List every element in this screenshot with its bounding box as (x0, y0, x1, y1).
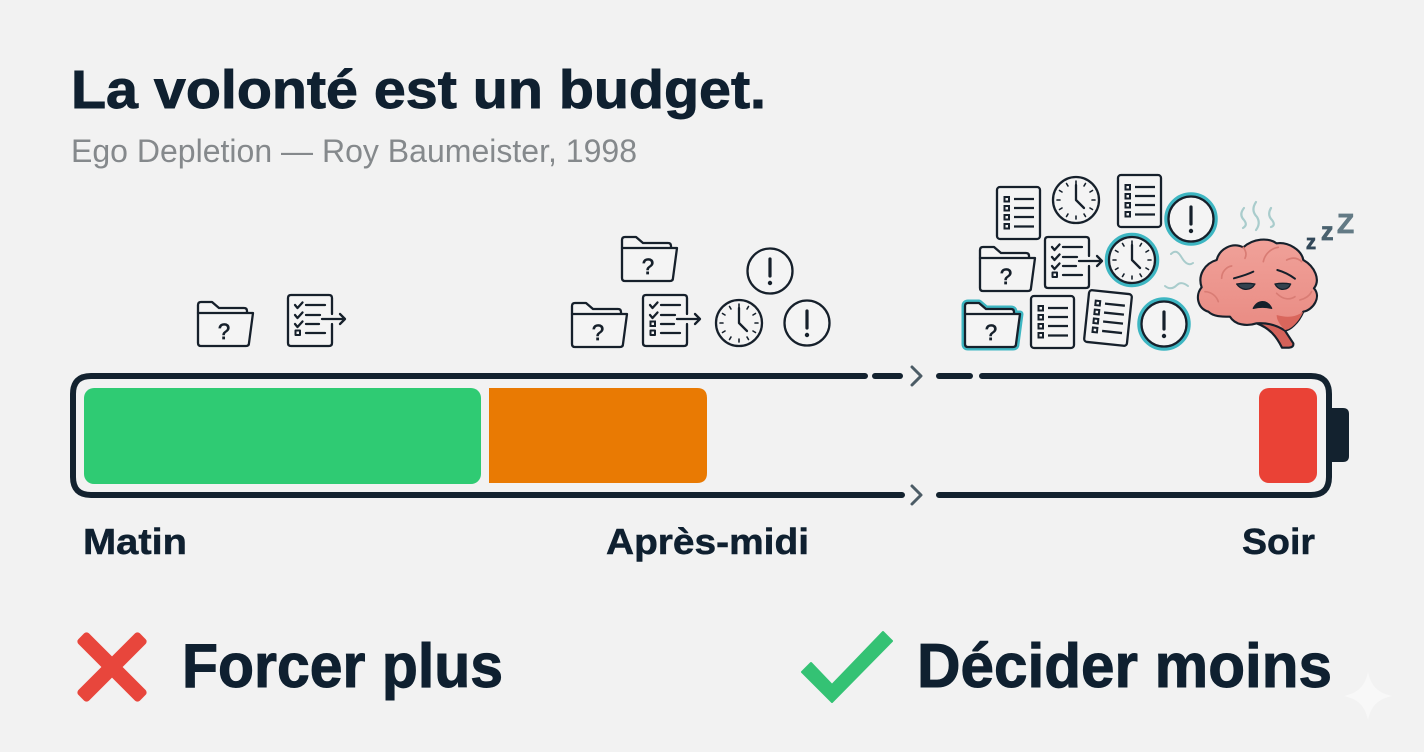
icon: highlighted clock (1107, 235, 1157, 285)
label: evening: Soir (1242, 521, 1315, 562)
icon: alert top (748, 248, 792, 294)
zzz sleep letters: Z (1337, 208, 1354, 239)
icon: red cross (76, 631, 148, 703)
text: force more: Forcer plus (182, 632, 503, 701)
icon: document list 2 (1118, 175, 1161, 227)
arrow: bottom chevron (912, 486, 921, 504)
zzz sleep letters (1306, 208, 1354, 254)
icon: steam lines (1241, 202, 1274, 230)
icon: checklist with arrow (1045, 237, 1102, 288)
label: afternoon: Après-midi (606, 521, 809, 562)
label: morning: Matin (83, 521, 187, 562)
arrow: top chevron (912, 367, 921, 385)
icon: alert right (784, 300, 830, 346)
icon: highlighted alert 2 (1140, 300, 1188, 348)
text: decide less: Décider moins (917, 632, 1332, 701)
icon: clock (716, 300, 762, 346)
icons: evening decision overload (965, 175, 1354, 348)
icon: folder: ? (1000, 264, 1012, 289)
red evening segment (1259, 388, 1317, 483)
icon: stress squiggles (1165, 252, 1193, 288)
icon: highlighted folder (965, 303, 1020, 347)
icon: tilted document list (1084, 290, 1132, 346)
icon: folder with question mark: ? (218, 319, 230, 344)
icon: clock 1 (1053, 177, 1099, 223)
subtitle: Ego Depletion — Roy Baumeister, 1998 (71, 133, 637, 169)
icon: highlighted folder: ? (985, 320, 997, 345)
icon: sparkle watermark (1344, 672, 1392, 720)
zzz sleep letters: z (1306, 232, 1316, 254)
icon: folder (980, 247, 1035, 291)
icon: document list 1 (997, 187, 1040, 239)
title: La volonté est un budget. (71, 60, 766, 120)
icons: morning decisions (198, 295, 345, 346)
battery outline (73, 376, 1329, 495)
zzz sleep letters: z (1321, 218, 1334, 246)
icon: green check (802, 632, 892, 702)
icon: checklist with arrow (643, 295, 700, 346)
icon: folder top: ? (642, 254, 654, 279)
icon: folder with question mark (198, 302, 253, 346)
icon: tired brain (1198, 240, 1317, 348)
battery (73, 367, 1349, 504)
green morning segment (84, 388, 481, 484)
icon: highlighted alert 1 (1166, 194, 1216, 244)
orange afternoon segment (489, 388, 707, 483)
icon: checklist with arrow (288, 295, 345, 346)
icon: folder bottom (572, 303, 627, 347)
icon: folder bottom: ? (592, 320, 604, 345)
icon: folder top (622, 237, 677, 281)
battery cap (1330, 408, 1349, 462)
icon: document list 3 (1031, 296, 1074, 348)
icons: afternoon decisions (572, 237, 830, 347)
